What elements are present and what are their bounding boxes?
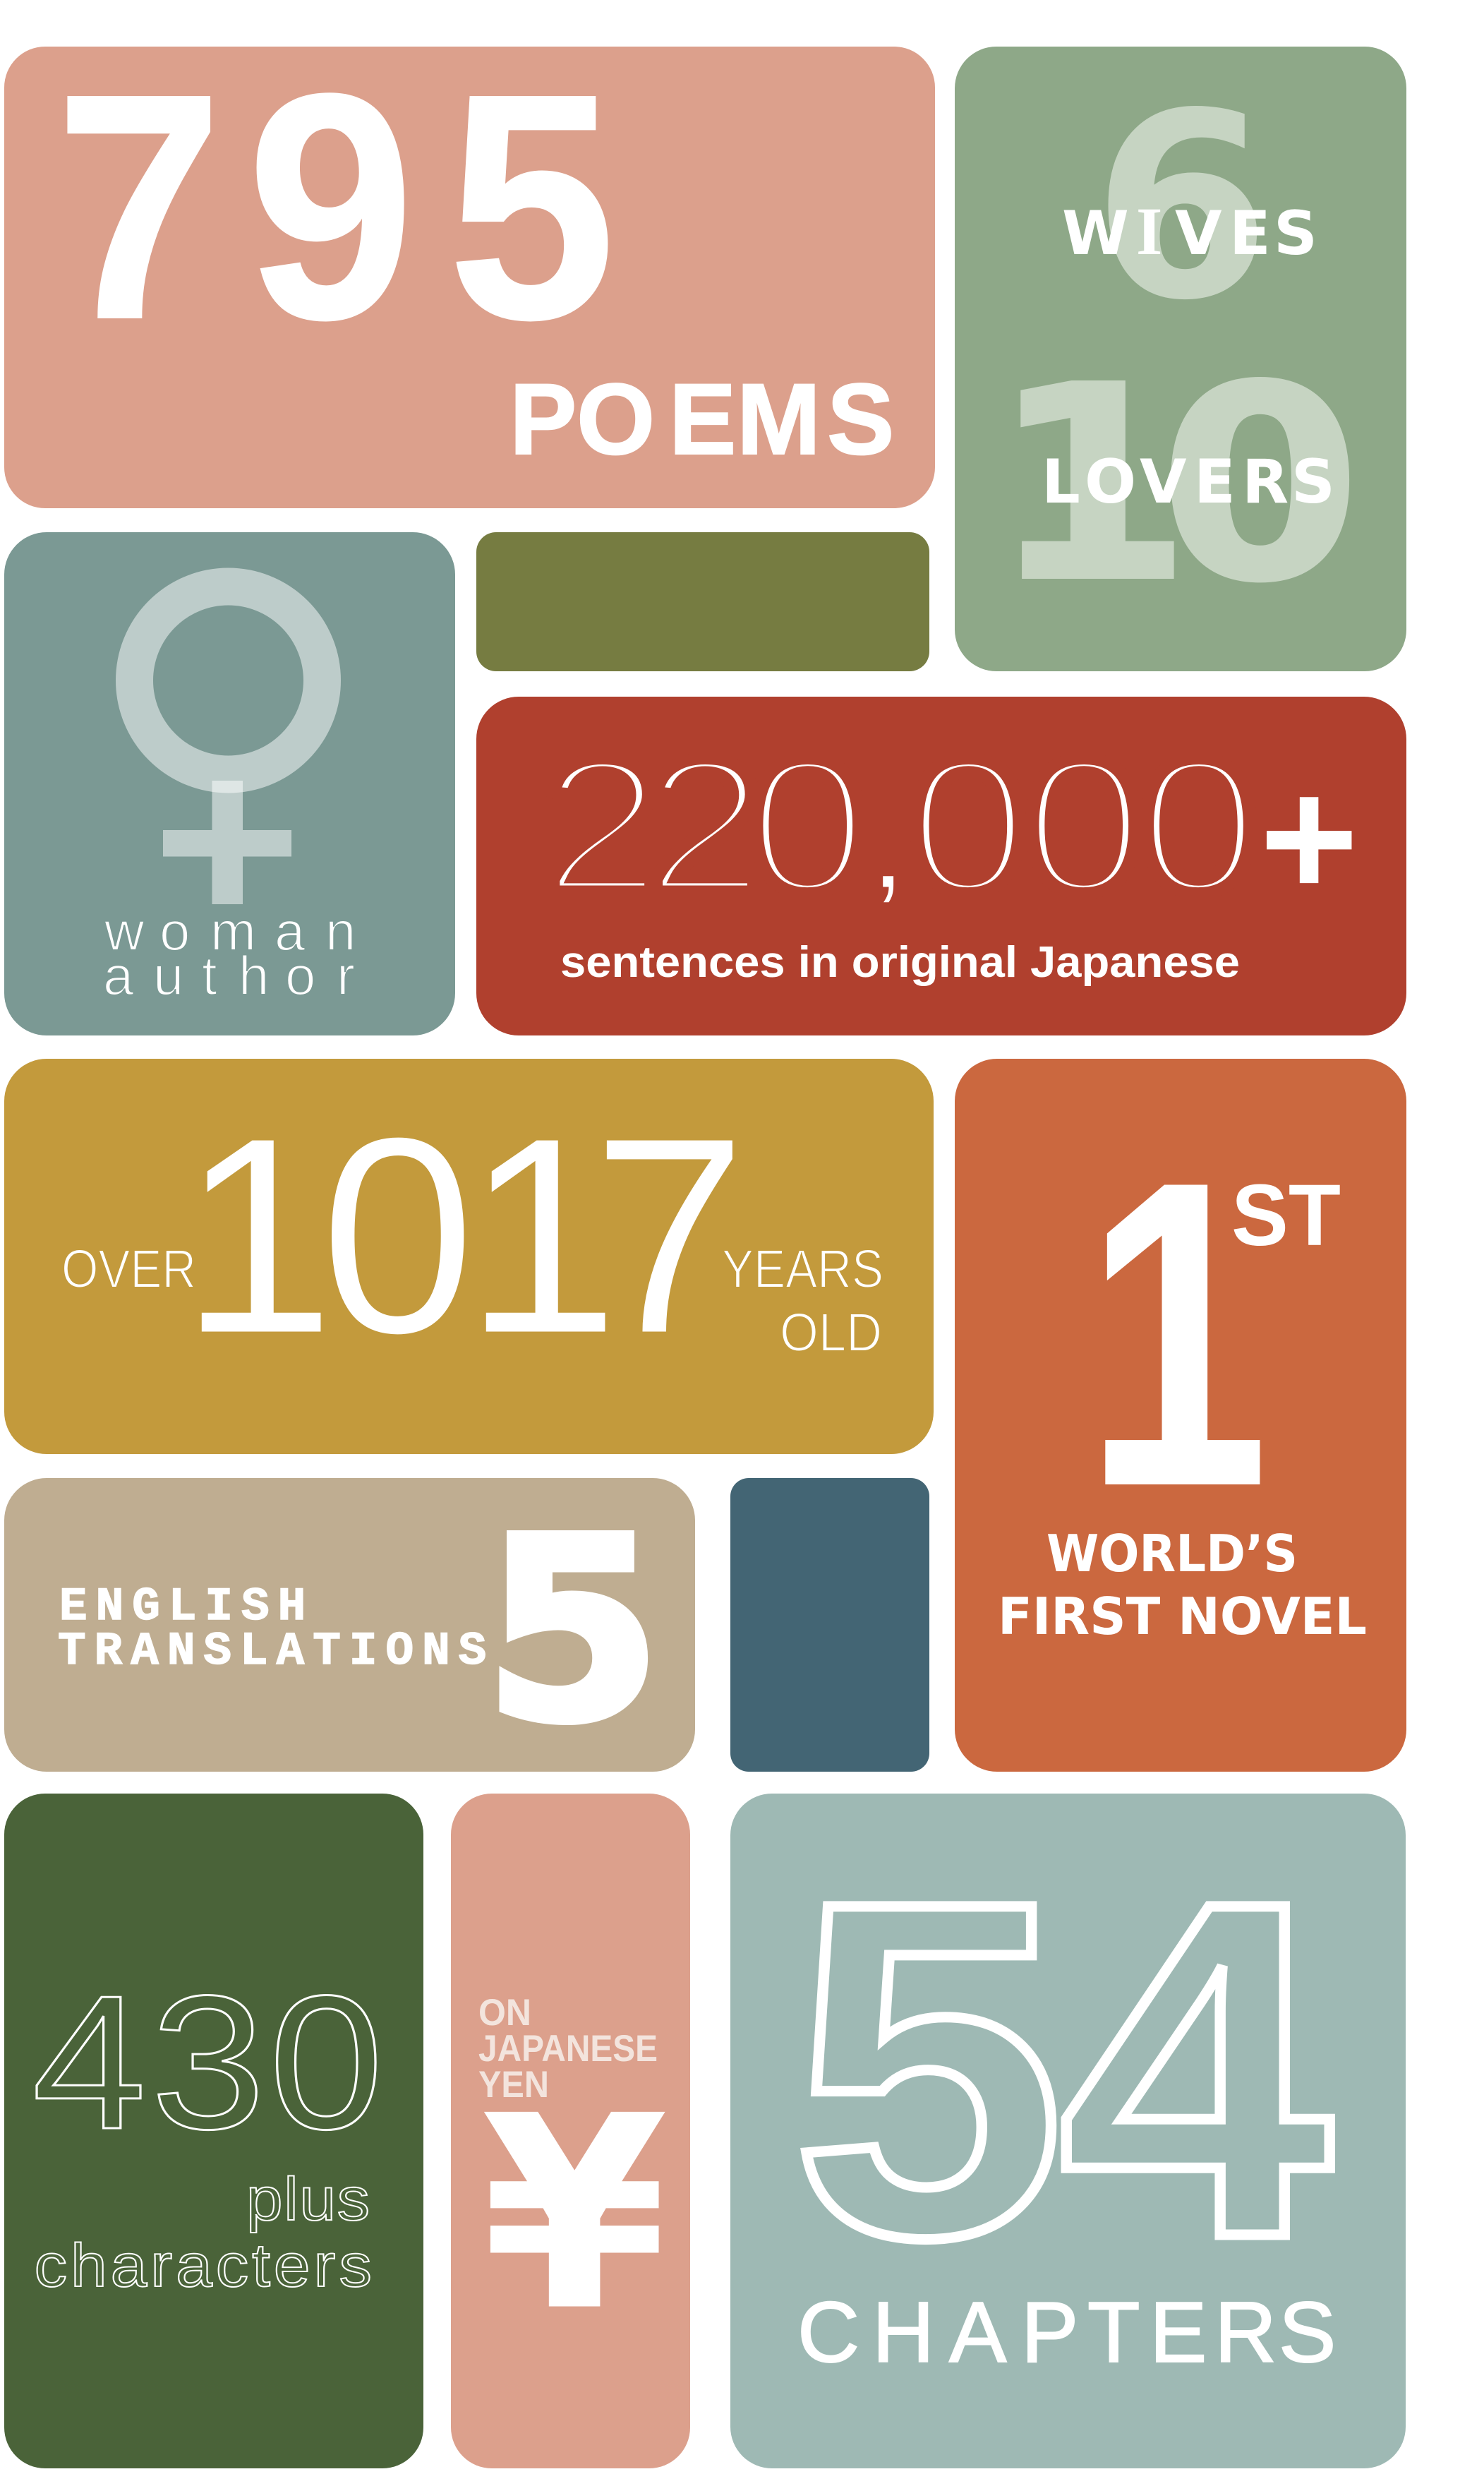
number: 795: 795 (55, 27, 615, 386)
label: woman: woman (104, 900, 356, 962)
label: sentences in original Japanese: sentences in original Japanese (560, 938, 1240, 987)
panel: over 1017 years old (4, 1059, 934, 1454)
panel: woman author (4, 532, 455, 1035)
number: 10: 10 (989, 328, 1362, 641)
label: OLD: OLD (780, 1302, 882, 1363)
number: 220,000: 000 (908, 719, 1258, 932)
label: POEMS: POEMS (509, 364, 894, 476)
label: ON JAPANESE YEN (478, 1992, 658, 2106)
label: characters: characters (35, 2231, 375, 2299)
label: author: author (103, 944, 355, 1007)
label: WIVES: W (1062, 198, 1129, 269)
panel: olive block (476, 532, 929, 671)
label: WIVES: VES (1175, 198, 1317, 269)
number: 430: 430 (32, 1956, 383, 2169)
label: OVER: OVER (61, 1239, 196, 1299)
panel: 5 english translations (4, 1478, 695, 1778)
panel: teal block (730, 1478, 929, 1772)
label: LOVERS: LOVERS (1042, 447, 1335, 517)
panel: 220,000+ sentences (476, 697, 1406, 1035)
icon: female symbol (134, 587, 322, 904)
label: ENGLISH: ENGLISH (59, 1580, 314, 1633)
number: 6: 6 (1092, 58, 1271, 356)
label: TRANSLATIONS: TRANSLATIONS (58, 1625, 495, 1678)
number: 220,000: , (869, 780, 907, 914)
label: ON JAPANESE YEN: YEN (478, 2064, 549, 2106)
label: WIVES: I (1136, 193, 1162, 269)
symbol: plus: + (1260, 743, 1358, 932)
number: 220,000: 220 (542, 719, 868, 932)
label: plus: plus (246, 2165, 371, 2233)
label: ST: ST (1231, 1167, 1341, 1264)
number: 5: 5 (483, 1484, 663, 1778)
number: 1: 1 (1085, 1091, 1269, 1578)
number: 1017: 1017 (179, 1079, 747, 1393)
panel: world's first novel (955, 1059, 1406, 1772)
label: ON JAPANESE YEN: ON (478, 1992, 531, 2034)
panel: 430 plus characters (4, 1794, 423, 2468)
panel: 54 chapters (730, 1794, 1406, 2468)
label: WORLD'S: WORLD’S (1046, 1524, 1298, 1583)
number: 54: 54 (792, 1803, 1335, 2336)
label: CHAPTERS: CHAPTERS (797, 2284, 1336, 2380)
label: FIRST NOVEL: FIRST NOVEL (998, 1587, 1367, 1646)
panel: on japanese yen (451, 1794, 690, 2468)
panel: wives and lovers (955, 47, 1406, 671)
symbol: yen: ¥ (483, 2061, 666, 2368)
label: ON JAPANESE YEN: JAPANESE (478, 2028, 658, 2070)
panel: 795 poems (4, 27, 935, 508)
label: YEARS: YEARS (722, 1239, 883, 1299)
